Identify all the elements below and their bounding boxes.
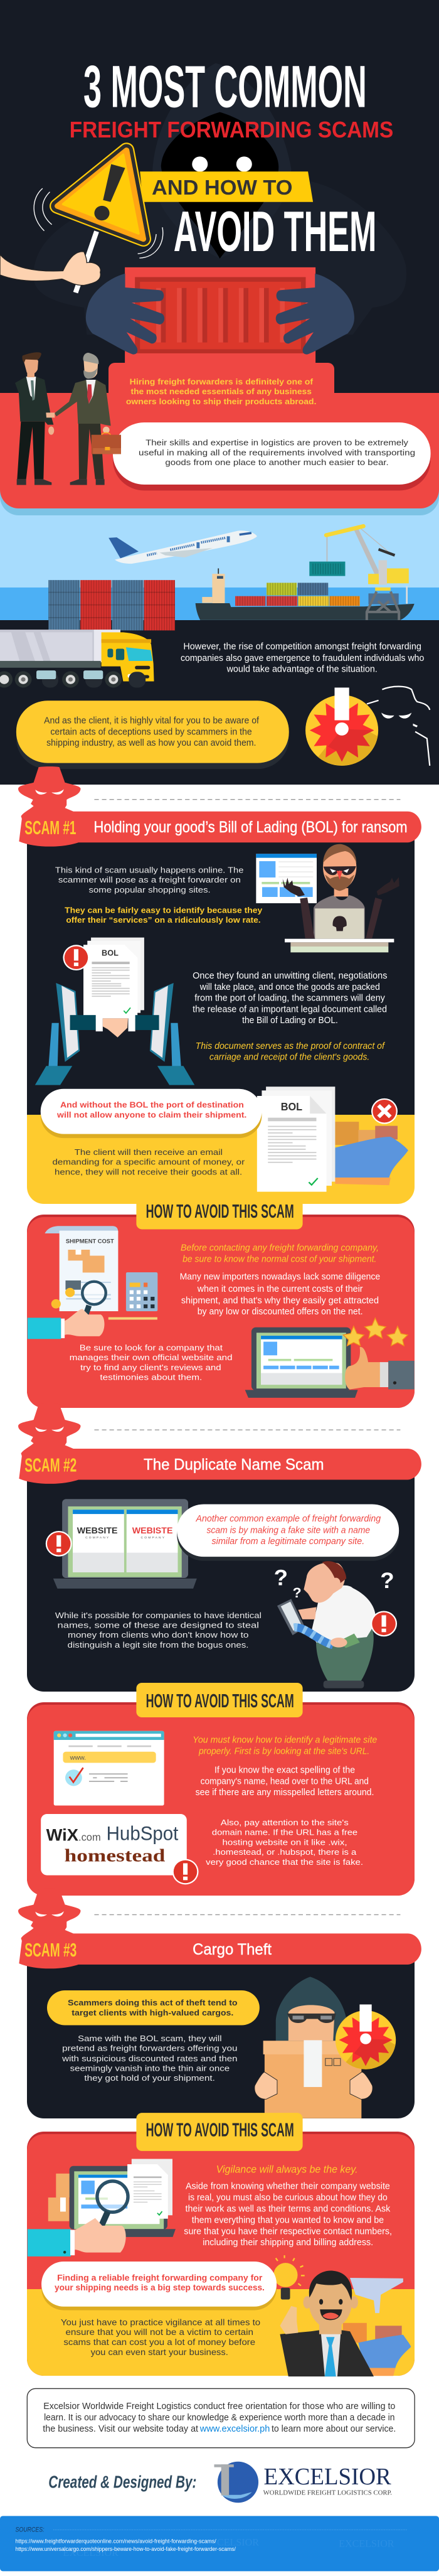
text: scam 1 intro: some popular shopping sites. <box>89 885 211 894</box>
callout: yellow client pill: certain acts of deceptions used by scammers in the <box>50 727 252 737</box>
tab: how to avoid 2 <box>136 1683 303 1717</box>
text: hiring intro: owners looking to ship their products abroad. <box>126 397 316 406</box>
callout: reliable company pill: Finding a reliable freight forwarding company for <box>57 2273 263 2282</box>
panel: sources footer: https://www.universalcargo.com/shippers-beware-how-to-avoid-fake-freight-forwarder-scams/ <box>16 2545 236 2552</box>
callout: reliable company pill: your shipping needs is a big step towards success. <box>55 2283 265 2292</box>
banner: and how to: AND HOW TO <box>152 176 293 200</box>
text: hiring intro <box>126 377 316 406</box>
heading: scam 3: Cargo Theft <box>193 1941 272 1958</box>
panel: sources footer: SOURCES: <box>16 2526 45 2534</box>
icon: scam 3 hat man banner <box>18 1889 421 1968</box>
text: identical names: distinguish a legit site from the bogus ones. <box>68 1640 248 1650</box>
illustration: hooded scammer silhouette <box>33 63 406 335</box>
illustration: two businessmen shaking hands <box>15 352 121 485</box>
text: domain name: Also, pay attention to the site's <box>221 1818 349 1827</box>
text: scam 1 intro: This kind of scam usually happens online. The <box>55 866 243 874</box>
logo: Excelsior: EXCELSIOR <box>264 2464 392 2490</box>
text: official website: manages their own official website and <box>70 1353 233 1362</box>
callout: BOL port pill: will not allow anyone to claim their shipment. <box>56 1110 246 1120</box>
icon: thumbs up with stars <box>343 1318 415 1389</box>
icon: scam 2 hat man banner <box>18 1403 421 1484</box>
panel: Excelsior orientation note: www.excelsior.ph <box>199 2424 270 2434</box>
text: domain name: .homestead, or .hubspot, there is a <box>213 1847 357 1857</box>
illustration: gloved hands <box>86 274 354 355</box>
illustration: stacked containers <box>48 580 175 630</box>
text: vigilance: is real, you must also be curious about how they do <box>188 2192 388 2203</box>
illustration: browser URL check: www. <box>70 1754 86 1761</box>
callout: fake site pill: scam is by making a fake site with a name <box>206 1526 370 1535</box>
panel: Excelsior orientation note: to learn more about our service. <box>272 2424 396 2434</box>
text: email demand: hence, they will not receive their goods at all. <box>55 1167 242 1177</box>
text: legitimate URL <box>193 1736 377 1798</box>
text: vigilance: sure that you have their respective contact numbers, <box>184 2226 392 2236</box>
panel: scam 2 avoid <box>27 1702 415 1896</box>
text: BOL explanation: This document serves as the proof of contract of <box>196 1041 386 1051</box>
illustration: magnifier over shipment paper <box>28 1272 157 1339</box>
illustration: ship with containers and rejection mark <box>335 1098 408 1185</box>
text: domain name: very good chance that the site is fake. <box>206 1857 363 1867</box>
illustration: laptop with duplicate websites: WEBISTE <box>132 1525 172 1535</box>
illustration: inspecting site and documents <box>28 2159 176 2257</box>
callout: fake site pill <box>177 1504 399 1561</box>
text: email demand: The client will then receive an email <box>75 1147 223 1157</box>
callout: white expertise pill <box>113 422 431 490</box>
heading: scam 2: SCAM #2 <box>24 1454 77 1476</box>
heading: scam 3: SCAM #3 <box>24 1939 77 1961</box>
text: official website: testimonies about them. <box>100 1373 202 1382</box>
illustration: businessman with idea bulb <box>273 2255 411 2376</box>
text: BOL explanation: carriage and receipt of the client's goods. <box>209 1053 369 1063</box>
banner: and how to <box>140 171 313 202</box>
panel: scam 1 <box>27 830 415 1204</box>
divider: scam 2 <box>94 1429 400 1431</box>
illustration: hacker at laptop <box>256 844 399 952</box>
icon: spy outline <box>367 687 430 766</box>
text: importers diligence: by any low or discounted offers on the net. <box>198 1307 363 1317</box>
panel: free hosting logos: .com <box>78 1832 101 1843</box>
icon: question marks: ? <box>293 1585 302 1601</box>
text: BOL explanation: Once they found an unwitting client, negotiations <box>193 971 387 981</box>
illustration: container ship <box>196 569 415 620</box>
panel: free hosting logos: homestead <box>65 1846 165 1865</box>
illustration: shipment cost paper: SHIPMENT COST <box>66 1238 114 1245</box>
heading: scam 2: The Duplicate Name Scam <box>144 1456 324 1473</box>
logo: Excelsior <box>214 2462 392 2503</box>
text: vigilance: Vigilance will always be the key. <box>216 2163 358 2176</box>
text: rise of competition: would take advantage of the situation. <box>226 665 378 675</box>
heading: scam 1 <box>24 817 408 839</box>
illustration: browser URL check <box>54 1731 164 1806</box>
tab: how to avoid 1 <box>136 1199 303 1229</box>
illustration: confused man with tablet <box>277 1561 397 1688</box>
text: scam 1 intro <box>55 866 263 925</box>
icon: question marks: ? <box>274 1565 288 1591</box>
illustration: laptop with duplicate websites: COMPANY <box>141 1536 165 1540</box>
illustration: laptop with reviews <box>245 1328 358 1398</box>
text: official website: Be sure to look for a company that <box>80 1343 223 1352</box>
logo: Excelsior: WORLDWIDE FREIGHT LOGISTICS CORP. <box>263 2489 392 2497</box>
text: official website <box>70 1343 233 1382</box>
text: legitimate URL: If you know the exact spelling of the <box>214 1766 355 1775</box>
illustration: port crane with container <box>309 526 409 591</box>
text: rise of competition: companies also gave emergence to fraudulent individuals who <box>181 653 424 663</box>
panel: red intro band <box>0 363 439 515</box>
text: BOL scam comparison: they got hold of your shipment. <box>84 2073 215 2083</box>
text: domain name <box>206 1818 363 1867</box>
panel: sky and sea <box>0 483 439 620</box>
text: rise of competition: However, the rise of competition amongst freight forwarding <box>183 642 421 652</box>
panel: dark hero background <box>0 0 439 785</box>
callout: yellow client pill: shipping industry, as well as how you can avoid them. <box>46 738 256 748</box>
divider: scam 3 <box>94 1914 400 1916</box>
text: email demand: demanding for a specific amount of money, or <box>52 1157 245 1167</box>
callout: white expertise pill: goods from one place to another much easier to bear. <box>165 458 389 467</box>
text: identical names: names, some of these are designed to steal <box>58 1621 259 1629</box>
icon: scam 1 hat man banner <box>18 766 421 847</box>
text: BOL explanation: the release of an important legal document called <box>193 1005 387 1014</box>
callout: high-valued cargo pill <box>47 1990 260 2026</box>
text: BOL scam comparison <box>61 2034 238 2083</box>
tab: how to avoid 2: HOW TO AVOID THIS SCAM <box>146 1690 294 1712</box>
tab: how to avoid 3: HOW TO AVOID THIS SCAM <box>146 2119 294 2140</box>
panel: free hosting logos: WiX <box>46 1825 78 1844</box>
text: legitimate URL: company's name, head over to the URL and <box>201 1776 369 1786</box>
text: identical names <box>55 1611 262 1650</box>
illustration: red shipping container <box>125 267 315 368</box>
text: BOL scam comparison: seemingly vanish into the thin air once <box>70 2064 230 2073</box>
text: domain name: hosting website on it like .wix, <box>222 1838 347 1847</box>
text: BOL scam comparison: with suspicious discounted rates and then <box>61 2054 238 2063</box>
callout: high-valued cargo pill: target clients with high-valued cargos. <box>71 2008 233 2017</box>
text: vigilance: including their shipping and billing address. <box>203 2238 373 2248</box>
callout: yellow client pill <box>16 700 289 769</box>
panel: scam 2 <box>27 1466 415 1692</box>
title line 2: FREIGHT FORWARDING SCAMS <box>70 117 393 142</box>
text: scam 1 intro: They can be fairly easy to identify because they <box>65 906 263 915</box>
text: scam 1 intro: offer their “services” on a ridiculously low rate. <box>66 915 261 925</box>
text: vigilance: their work as well as their terms and conditions. Ask <box>186 2204 391 2214</box>
illustration: BOL document: BOL <box>281 1100 302 1113</box>
callout: reliable company pill <box>41 2262 277 2310</box>
text: importers diligence <box>181 1284 379 1317</box>
illustration: laptop with duplicate websites: COMPANY <box>85 1536 109 1540</box>
text: vigilance closing: you can even start your business. <box>91 2348 228 2357</box>
text: identical names: money from clients who don't know how to <box>68 1630 248 1640</box>
panel: free hosting logos: HubSpot <box>107 1822 179 1845</box>
text: vigilance: them everything that you wanted to know and be <box>192 2215 384 2225</box>
panel: sources footer <box>0 2516 439 2571</box>
text: importers diligence: when it comes in the current costs of their <box>197 1284 363 1294</box>
text: BOL explanation: will take place, and once the goods are packed <box>199 982 380 992</box>
icon: alert medal <box>305 687 378 766</box>
illustration: shipment cost paper <box>45 1226 118 1311</box>
text: vigilance closing <box>61 2317 260 2357</box>
text: BOL scam comparison: pretend as freight forwarders offering you <box>62 2044 238 2053</box>
text: normal cost: Before contacting any freight forwarding company, <box>181 1243 379 1253</box>
text: BOL explanation <box>193 971 387 1063</box>
text: normal cost <box>180 1243 380 1282</box>
text: identical names: While it's possible for companies to have identical <box>55 1611 262 1620</box>
text: normal cost: Many new importers nowadays lack some diligence <box>180 1272 380 1282</box>
panel: free hosting logos <box>41 1814 199 1884</box>
text: vigilance closing: scams that can cost you a lot of money before <box>63 2337 255 2347</box>
panel: sources footer: EXCELSIOR <box>63 2548 119 2558</box>
text: vigilance <box>184 2163 392 2248</box>
callout: yellow client pill: And as the client, it is highly vital for you to be aware of <box>44 716 260 726</box>
heading: scam 3 <box>24 1939 272 1961</box>
text: created and designed by: Created & Designed By: <box>48 2472 196 2491</box>
panel: sources footer: EXCELSIOR <box>339 2539 394 2550</box>
callout: fake site pill: similar from a legitimate company site. <box>212 1537 364 1547</box>
panel: Excelsior orientation note: the business. Visit our website today at <box>43 2424 198 2434</box>
tab: how to avoid 1: HOW TO AVOID THIS SCAM <box>146 1201 294 1222</box>
text: official website: try to find any client's reviews and <box>80 1363 221 1372</box>
text: vigilance: Aside from knowing whether their company website <box>186 2182 390 2192</box>
text: normal cost: be sure to know the normal cost of your shipment. <box>182 1255 376 1264</box>
illustration: BOL document <box>257 1087 335 1192</box>
text: scam 1 intro: scammer will pose as a freight forwarder on <box>58 875 241 884</box>
illustration: BOL handshake between monitors: BOL <box>102 948 119 958</box>
panel: Excelsior orientation note <box>27 2388 415 2448</box>
illustration: laptop with duplicate websites: WEBSITE <box>77 1525 118 1535</box>
text: domain name: domain name. If the URL has a free <box>212 1828 357 1837</box>
callout: high-valued cargo pill: Scammers doing this act of theft tend to <box>68 1998 238 2007</box>
callout: BOL port pill: And without the BOL the port of destination <box>60 1100 244 1110</box>
illustration: airplane <box>108 530 257 564</box>
panel: sources footer: CELSIOR <box>217 2537 259 2548</box>
icon: warning sign held by hand <box>0 150 163 292</box>
text: legitimate URL: properly. First is by looking at the site's URL. <box>198 1747 369 1757</box>
text: email demand <box>52 1147 245 1177</box>
panel: scam 1 avoid <box>27 1215 415 1408</box>
panel: sources footer: https://www.freightforwarderquoteonline.com/news/avoid-freight-forwarding-scams/ <box>16 2537 216 2544</box>
icon: question marks: ? <box>380 1568 394 1593</box>
callout: BOL port pill <box>41 1089 262 1138</box>
callout: white expertise pill: useful in making all of the requirements involved with transporting <box>139 448 415 457</box>
panel: scam 3 avoid <box>27 2132 415 2376</box>
illustration: truck <box>0 630 154 687</box>
text: importers diligence: shipment, and that's why they easily get attracted <box>181 1296 379 1306</box>
callout: white expertise pill: Their skills and expertise in logistics are proven to be extremely <box>145 438 408 447</box>
heading: scam 2 <box>24 1454 324 1476</box>
text: BOL explanation: from the port of loading, the scammers will deny <box>194 994 386 1004</box>
panel: Excelsior orientation note: learn. It is our advocacy to share our knowledge & experience worth more than a decade in <box>44 2413 394 2423</box>
text: BOL scam comparison: Same with the BOL scam, they will <box>78 2034 222 2043</box>
illustration: thief holding cargo box <box>255 1977 396 2118</box>
text: legitimate URL: You must know how to identify a legitimate site <box>193 1736 377 1745</box>
illustration: laptop with duplicate websites <box>46 1499 197 1589</box>
text: rise of competition <box>181 642 424 675</box>
illustration: BOL handshake between monitors <box>35 938 194 1085</box>
text: vigilance closing: ensure that you will not be a victim to certain <box>65 2327 253 2337</box>
callout: fake site pill: Another common example of freight forwarding <box>196 1514 381 1524</box>
panel: scam 3 <box>27 1952 415 2118</box>
text: hiring intro: the most needed essentials of any business <box>130 387 312 396</box>
panel: Excelsior orientation note: Excelsior Worldwide Freight Logistics conduct free orientation for those who are willing to <box>43 2402 395 2412</box>
heading: scam 1: SCAM #1 <box>24 817 76 839</box>
text: legitimate URL: see if there are any misspelled letters around. <box>196 1788 374 1798</box>
text: hiring intro: Hiring freight forwarders is definitely one of <box>130 377 314 386</box>
icon: question marks <box>274 1565 394 1601</box>
text: BOL explanation: the Bill of Lading or BOL. <box>242 1016 338 1026</box>
divider: scam 1 <box>94 798 400 800</box>
text: vigilance closing: You just have to practice vigilance at all times to <box>61 2317 260 2327</box>
tab: how to avoid 3 <box>136 2113 303 2151</box>
